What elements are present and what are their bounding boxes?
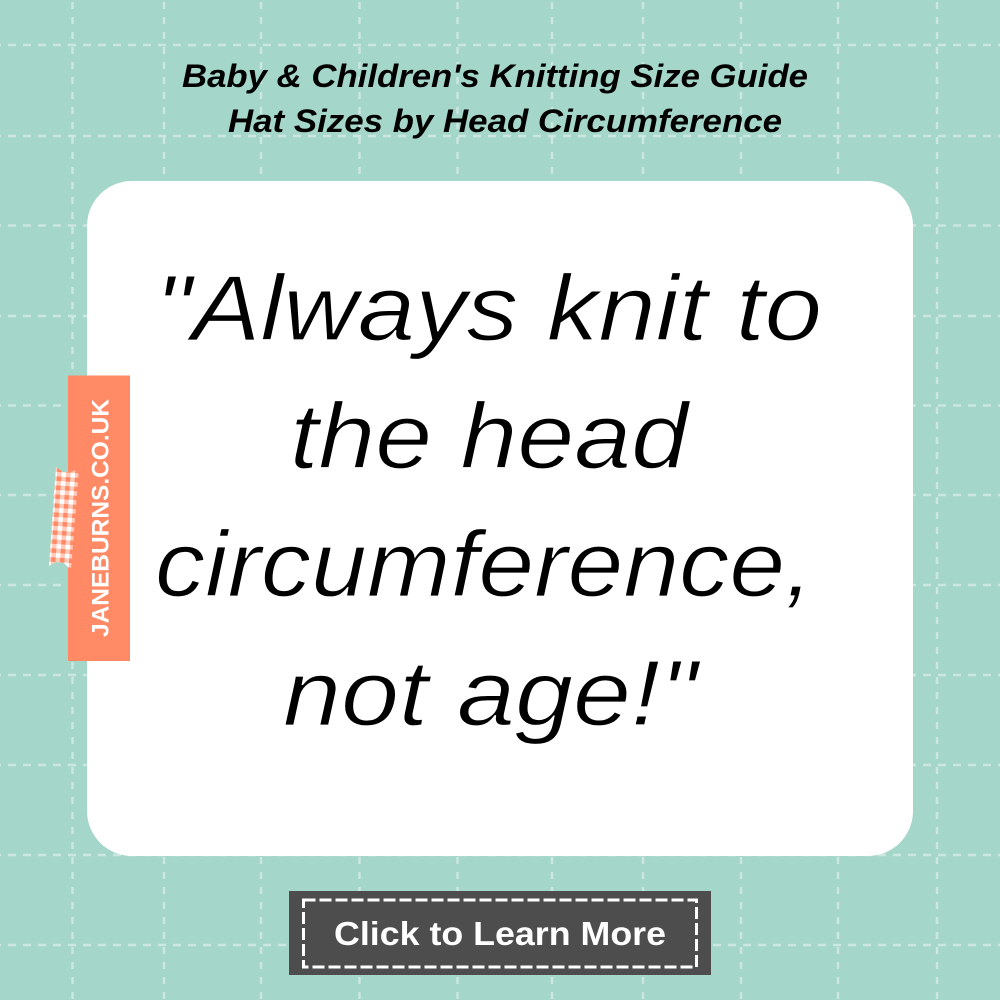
button: click to learn more — [289, 891, 711, 975]
quote text: not age!" — [283, 641, 701, 745]
side label: janeburns.co.uk: JANEBURNS.CO.UK — [88, 398, 114, 637]
panel: quote card — [87, 181, 913, 856]
quote text: "Always knit to — [155, 256, 822, 360]
title: Baby & Children's Knitting Size Guide — [182, 58, 808, 94]
quote text: the head — [290, 384, 692, 488]
icon: gingham washi tape — [49, 467, 79, 570]
button: click to learn more: Click to Learn More — [334, 915, 666, 952]
quote text — [155, 256, 822, 745]
side label: janeburns.co.uk — [68, 376, 130, 661]
quote text: circumference, — [155, 512, 813, 616]
title — [182, 58, 808, 139]
title: Hat Sizes by Head Circumference — [228, 103, 782, 139]
